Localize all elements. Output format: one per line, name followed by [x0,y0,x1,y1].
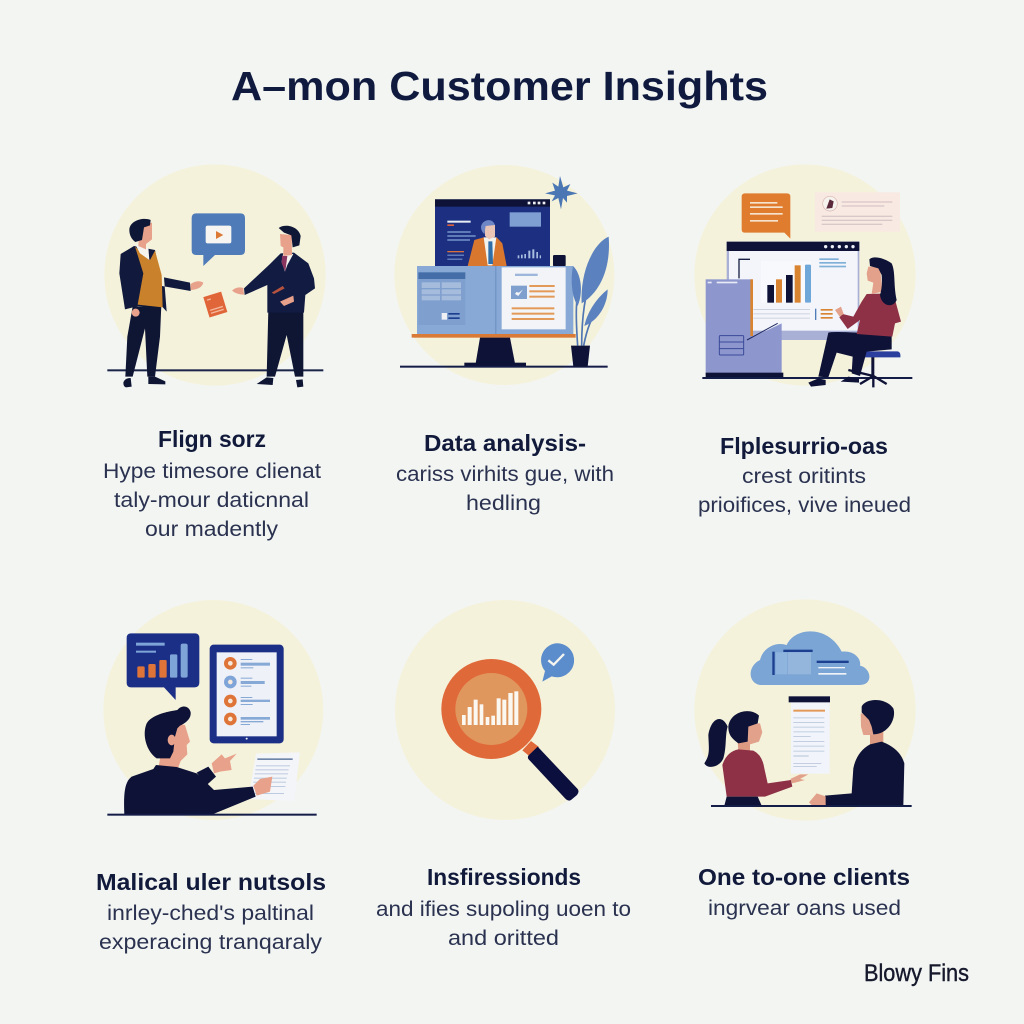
man from behind [107,706,317,816]
panel: data analysis [394,165,614,515]
text block 3: Flplesurrio-oas [720,433,888,459]
text block 6: ingrvear oans used [708,897,901,920]
illustration: magnifier over bar chart [395,600,615,820]
tablet [210,645,284,743]
text block 2: Data analysis- [424,430,586,456]
illustration: two men handshake conversation [104,164,326,387]
floating document [203,292,227,317]
text block 4: inrley-ched's paltinal [107,902,314,925]
illustration: woman viewing chart [694,164,916,387]
panel: man with tablet [96,600,326,954]
text block 1: taly-mour daticnnal [114,489,309,512]
title: A–mon Customer Insights [231,63,768,109]
text block 5: and ifies supoling uoen to [376,898,631,921]
orange chat bubble [742,193,790,239]
woman with ponytail [704,711,808,806]
plant [571,237,609,367]
illustration: desk with monitor and plant [394,165,614,385]
left man [119,219,203,387]
open folder panels [417,266,573,334]
monitor with presenter [435,199,566,268]
panel: magnifying glass [376,600,631,950]
text block 4 [96,869,326,954]
monitor with bar chart [727,242,859,340]
speech bubble with video [192,213,245,266]
paper sheet [248,752,300,801]
purple cabinet [702,279,912,379]
desk and stand [400,334,608,368]
text block 1 [103,426,321,541]
text block 5: Insfiressionds [427,864,581,890]
text block 1: Flign sorz [158,426,266,452]
text block 1: Hype timesore clienat [103,460,321,483]
cloud icon [751,631,869,685]
text block 2: cariss virhits gue, with [396,463,614,486]
text block 5: and oritted [448,927,559,950]
pink profile card [815,192,900,232]
text block 2 [396,430,614,515]
text block 4: experacing tranqaraly [99,931,323,954]
text block 6: One to-one clients [698,864,910,890]
bar chart bubble [127,633,199,700]
text block 4: Malical uler nutsols [96,869,326,895]
document [789,696,830,774]
right man [232,226,315,387]
panel: two men talking [103,164,326,541]
star icon [545,176,578,209]
text block 3: crest oritints [742,465,866,488]
text block 5 [376,864,631,950]
text block 2: hedling [466,492,541,515]
magnifying glass [441,659,579,801]
footer logo text: Blowy Fins [864,960,969,987]
illustration: man pointing at report [103,600,323,820]
panel: woman at chart screen [694,164,916,517]
text block 1: our madently [145,518,279,541]
illustration: two people with cloud and document [694,599,916,821]
check bubble [541,643,574,682]
man with dark sweater [809,700,904,806]
panel: one to one clients [694,599,916,920]
text block 6 [698,864,910,920]
text block 3 [698,433,911,517]
seated woman [808,257,901,387]
text block 3: prioifices, vive ineued [698,494,911,517]
